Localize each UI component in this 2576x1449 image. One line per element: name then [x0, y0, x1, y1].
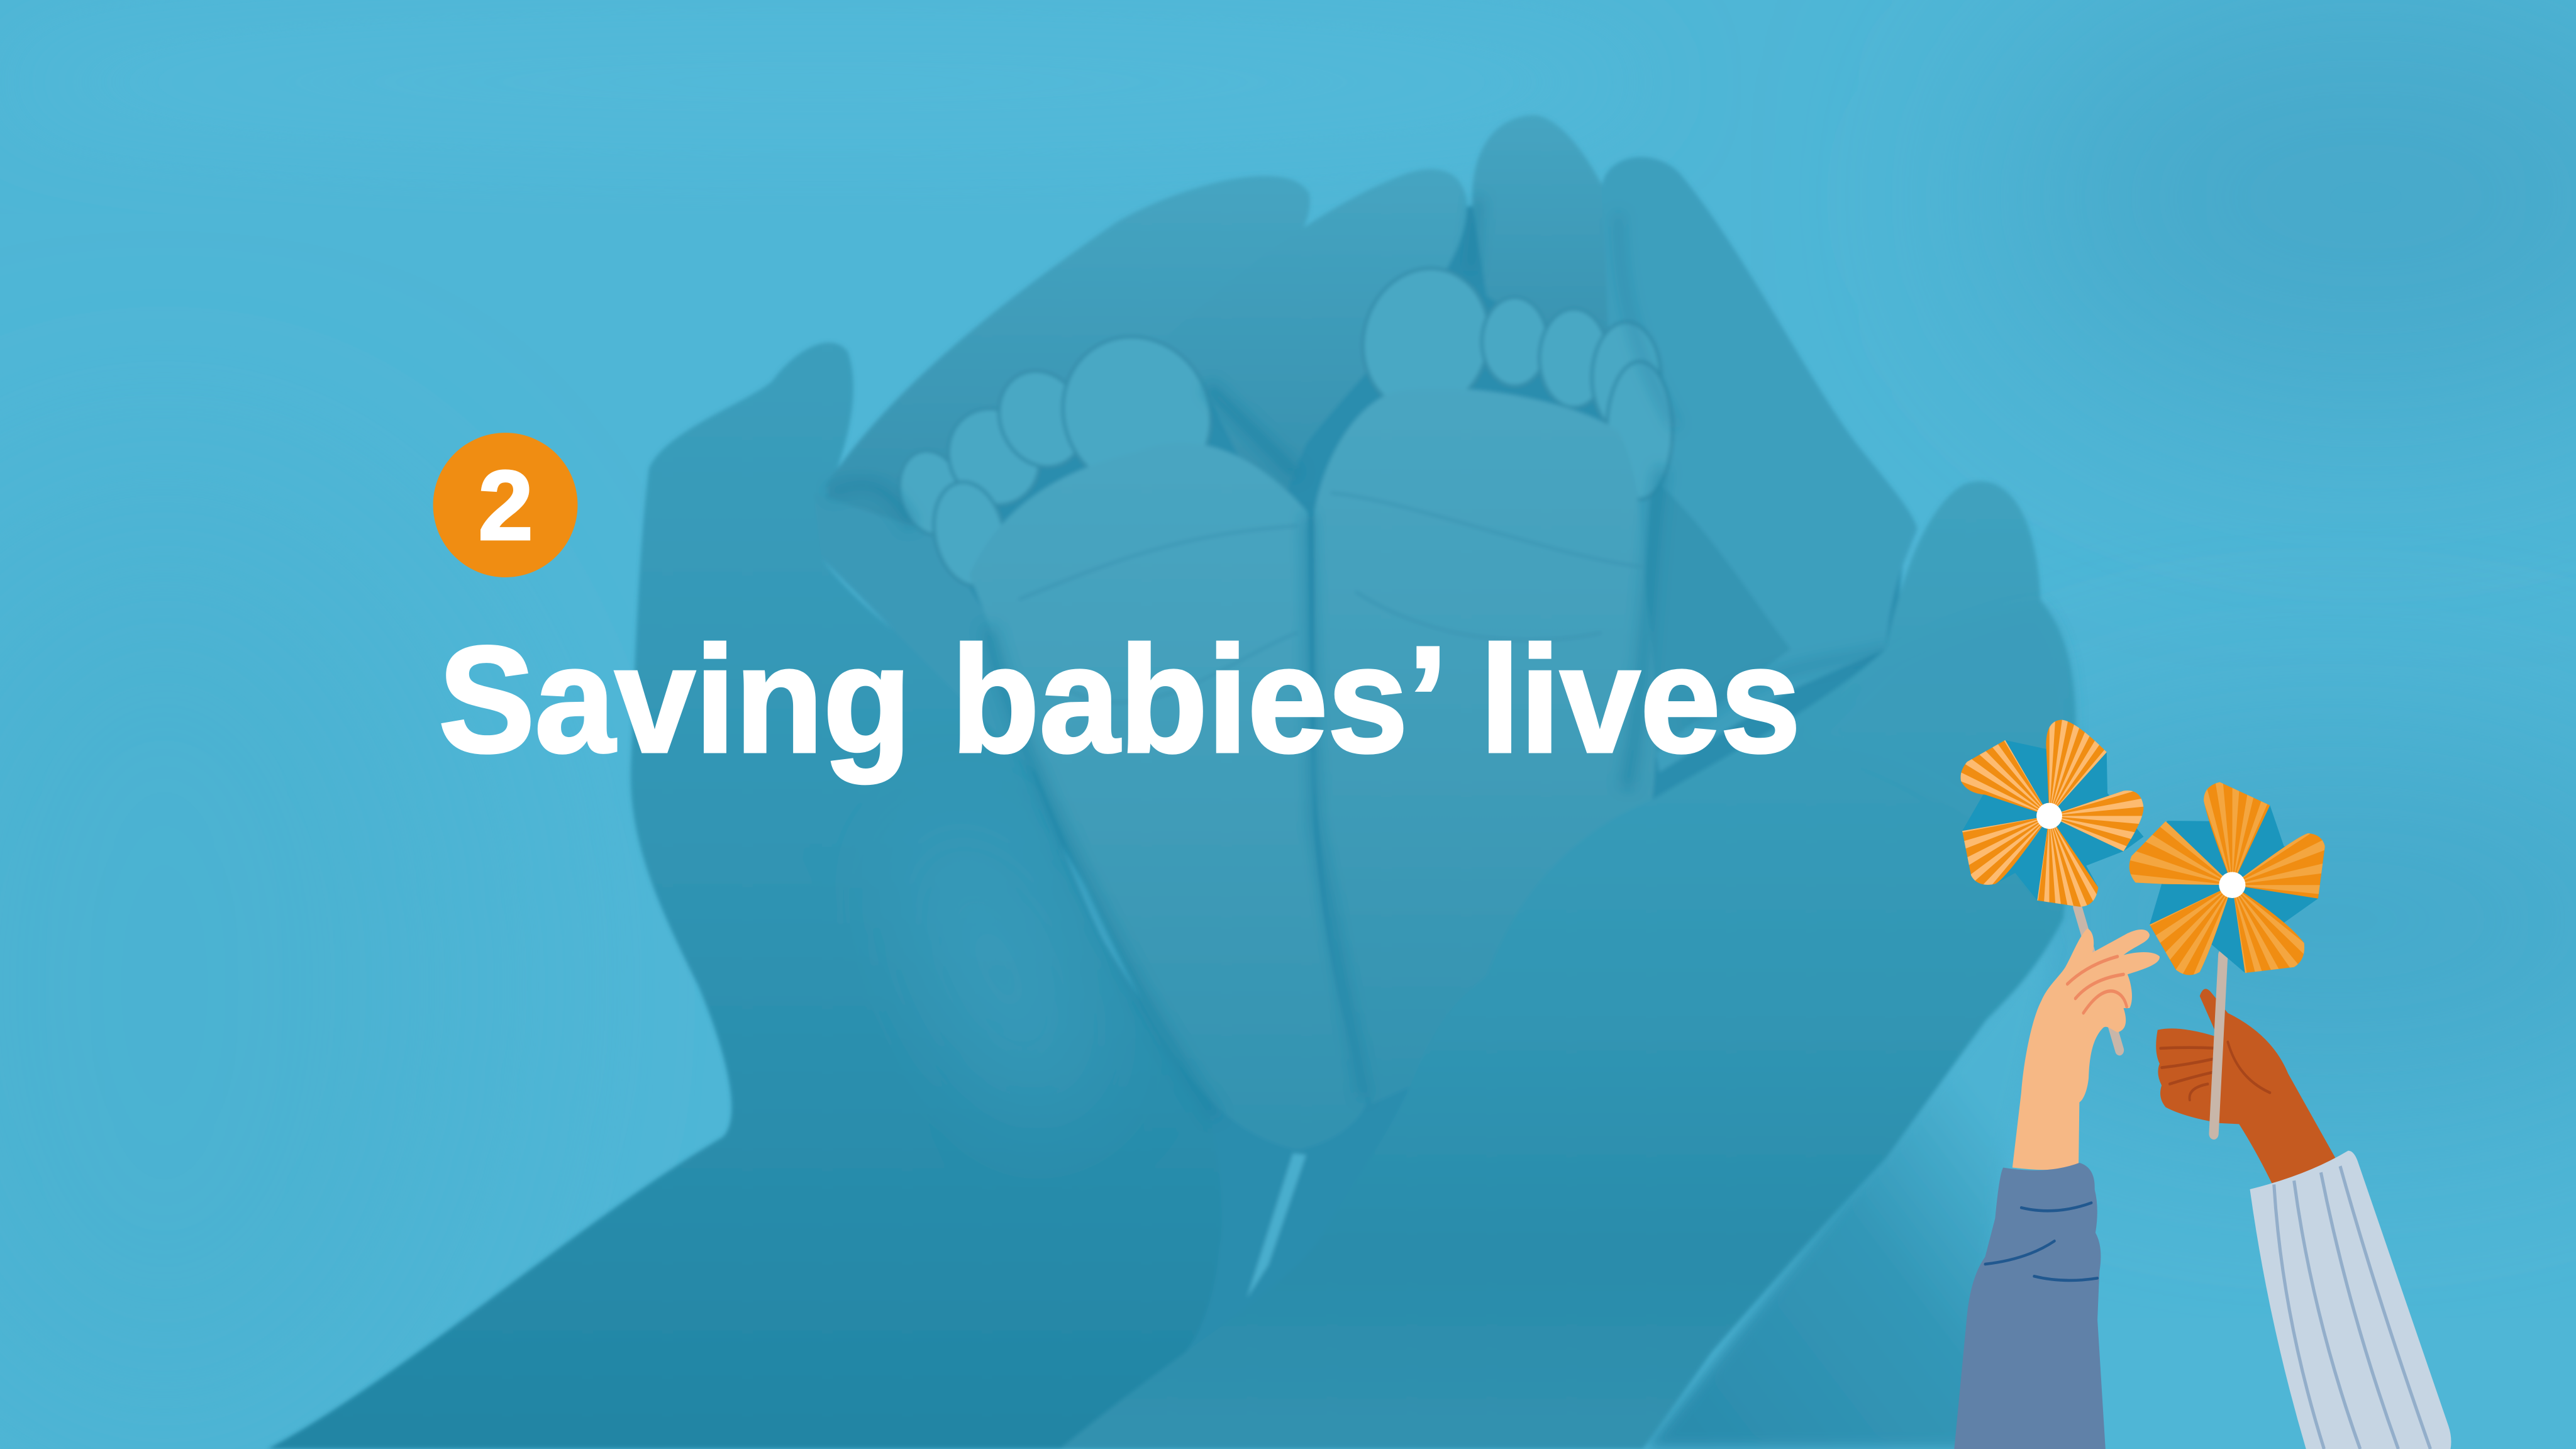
photo: hands cradling baby feet: [268, 115, 2076, 1449]
right pinwheel: [2129, 782, 2325, 975]
left hand and forearm: [268, 343, 1222, 1449]
dark-skinned hand: [2156, 989, 2335, 1184]
blue sleeve: [1954, 1163, 2106, 1449]
right foot toes: [1347, 254, 1672, 499]
left hand highlight: [874, 800, 1124, 1138]
dark backing behind fingers and feet: [816, 203, 1906, 1449]
right pinwheel stick: [2214, 955, 2223, 1134]
number badge: 2: [478, 451, 533, 561]
number badge: [433, 433, 577, 577]
foot sole creases: [1019, 493, 1643, 702]
right thumb shading: [1807, 604, 2074, 912]
crease lines and shadows: [830, 197, 1889, 1117]
light-skinned hand: [2012, 928, 2160, 1170]
title: Saving babies’ lives: [438, 614, 1801, 784]
left pinwheel stick: [2077, 907, 2119, 1050]
pale striped sleeve: [2250, 1151, 2451, 1449]
highlight slit between the wrists: [1247, 1153, 1306, 1298]
illustration: hands holding pinwheels: [1954, 720, 2451, 1449]
left foot: [969, 442, 1367, 1150]
right foot: [1314, 388, 1656, 1104]
left middle finger: [1150, 169, 1467, 526]
right outer finger: [1602, 157, 1917, 772]
left pinwheel: [1961, 720, 2143, 907]
right palm and thumb: [1060, 481, 2076, 1449]
left index finger: [826, 176, 1310, 558]
left foot toes: [891, 309, 1239, 592]
right hand inner finger shadow: [1635, 477, 1790, 772]
left palm inner: [813, 493, 1035, 772]
right ring finger: [1472, 115, 1679, 402]
second forearm behind: [1643, 936, 2053, 1449]
